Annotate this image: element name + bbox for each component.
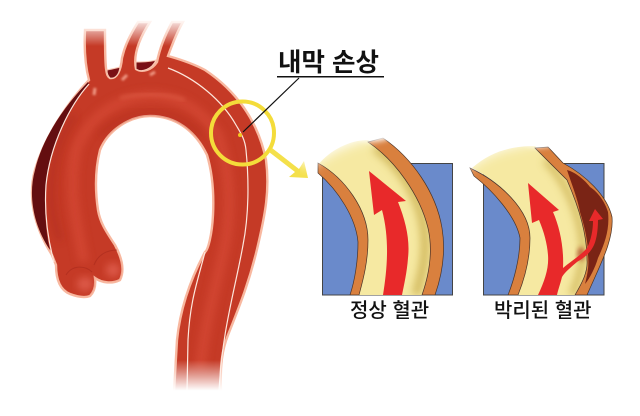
label: 정상 혈관 xyxy=(350,299,429,322)
arrow: to panels xyxy=(269,148,308,178)
panel: normal vessel xyxy=(300,120,452,322)
lumen shading near outer wall xyxy=(375,148,425,295)
flow arrow xyxy=(369,171,409,295)
inner wall xyxy=(470,168,530,295)
vessel lumen xyxy=(318,140,430,295)
heading: intimal injury: 내막 손상 xyxy=(278,49,379,77)
vessel lumen xyxy=(472,146,587,295)
hematoma xyxy=(567,170,608,284)
bulging outer wall xyxy=(535,147,612,295)
dissection flap lines xyxy=(45,68,248,392)
top and bottom fades xyxy=(70,10,235,396)
injury point xyxy=(238,133,242,137)
outer wall xyxy=(368,138,444,295)
fade over top of vessel xyxy=(469,146,551,176)
illustration: dissected aorta xyxy=(32,10,267,396)
bruise shadow xyxy=(577,247,585,261)
inner wall xyxy=(318,163,368,295)
blue background xyxy=(322,164,452,295)
aorta shading xyxy=(52,72,229,370)
lumen shading near outer wall xyxy=(545,160,583,295)
flow arrow with false channel xyxy=(528,183,603,295)
aorta body xyxy=(32,22,267,392)
panel: dissected vessel xyxy=(469,146,613,319)
notches between arch branches xyxy=(107,60,156,78)
leader line xyxy=(243,78,299,132)
callout: injury circle xyxy=(211,102,274,164)
false lumen: dark left channel xyxy=(32,82,89,250)
label: 박리된 혈관 xyxy=(494,299,592,322)
fade over top of vessel xyxy=(300,138,390,175)
blue background xyxy=(484,164,604,295)
